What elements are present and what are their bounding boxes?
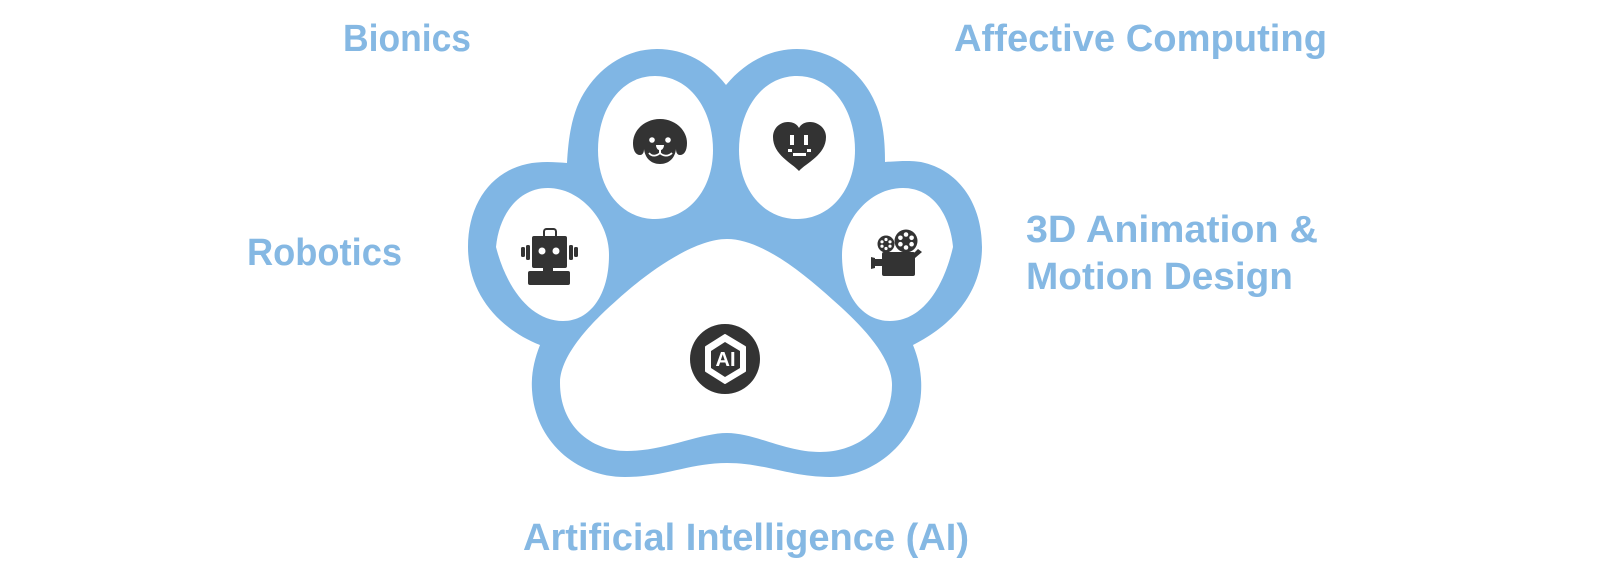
icon: robot	[521, 229, 578, 285]
icon: film camera	[871, 230, 922, 276]
icon: AI hexagon badge	[690, 324, 760, 394]
icon: dog	[633, 119, 687, 164]
label: 3D Animation & Motion Design	[1026, 209, 1318, 298]
icon: heart with smile	[773, 122, 826, 171]
label: Bionics: Bionics	[343, 18, 471, 60]
toe pad: 3D animation	[842, 188, 953, 321]
paw outline	[468, 49, 982, 477]
label: 3D Animation & Motion Design: 3D Animation &	[1026, 209, 1318, 251]
label: Affective Computing: Affective Computing	[954, 18, 1327, 60]
label: Artificial Intelligence (AI): Artificial Intelligence (AI)	[523, 517, 969, 559]
icon: AI hexagon badge: AI	[716, 349, 736, 371]
label: Robotics: Robotics	[247, 232, 402, 274]
toe pad: bionics	[598, 76, 713, 219]
main pad: artificial intelligence	[560, 239, 892, 452]
label: 3D Animation & Motion Design: Motion Design	[1026, 256, 1293, 298]
paw diagram	[468, 49, 982, 477]
toe pad: robotics	[496, 188, 609, 321]
toe pad: affective computing	[739, 76, 855, 219]
